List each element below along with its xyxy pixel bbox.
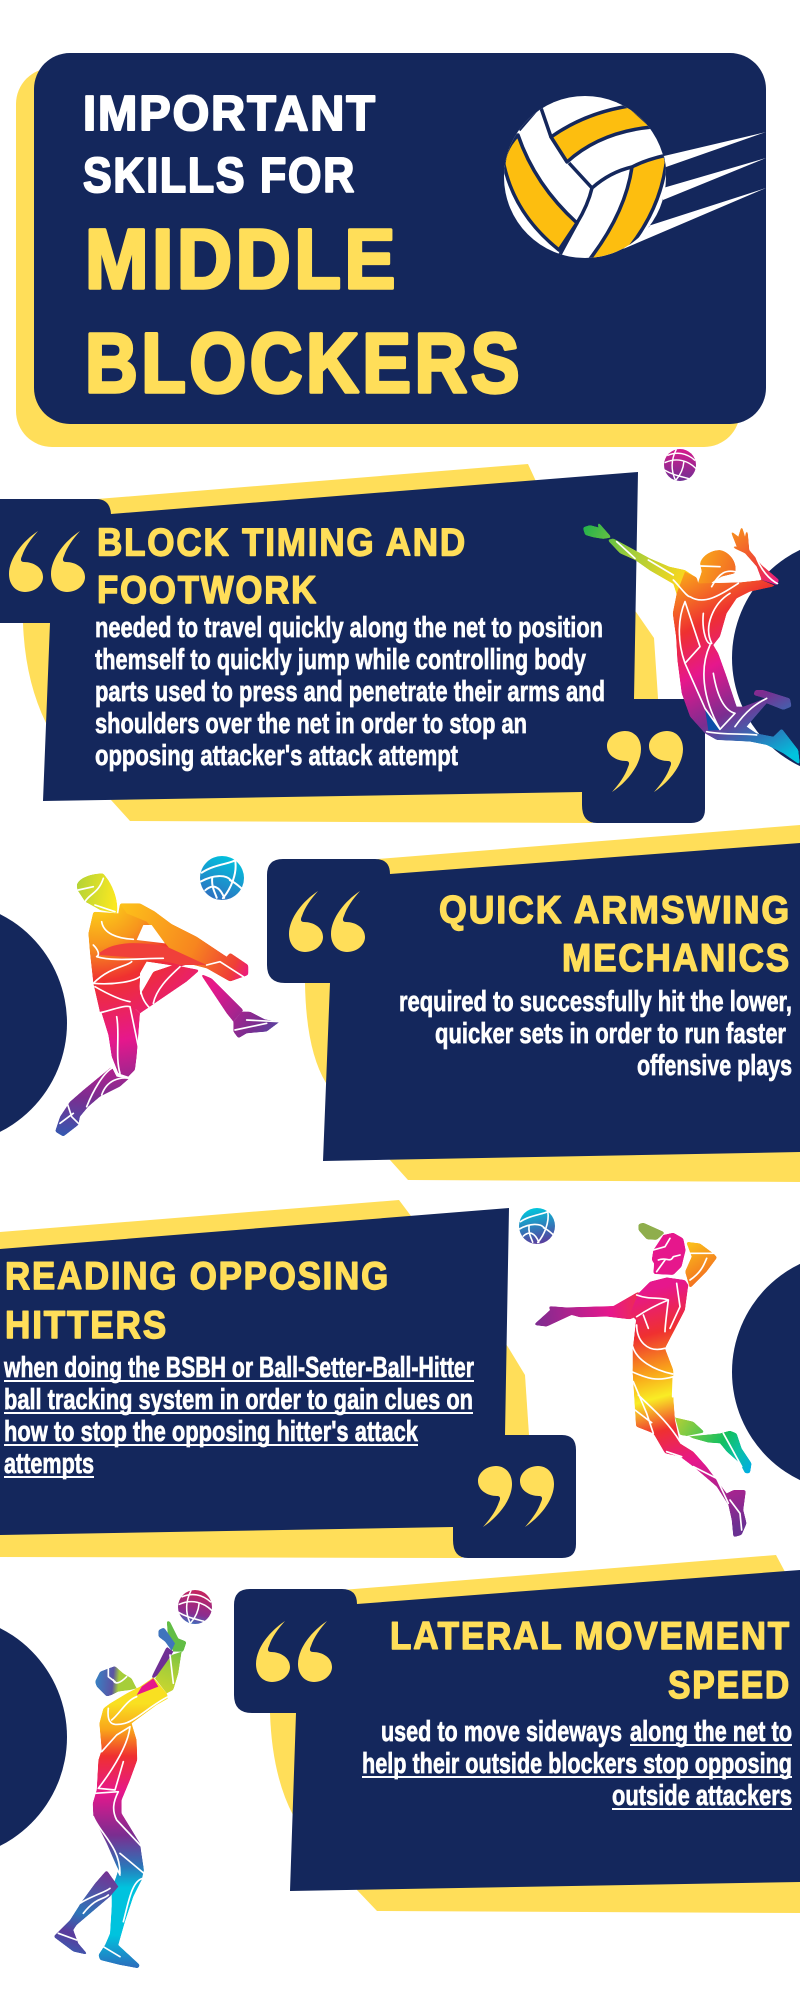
body text xyxy=(399,986,792,1082)
left navy circle xyxy=(0,901,67,1145)
left navy circle xyxy=(0,1615,67,1859)
right navy circle xyxy=(732,1252,800,1492)
panel: reading opposing hitters xyxy=(0,1200,800,1558)
title xyxy=(83,87,523,410)
title: SKILLS FOR xyxy=(83,149,356,203)
icon: volleyball with speed lines xyxy=(504,96,766,264)
panel: lateral movement speed xyxy=(0,1555,800,1968)
heading xyxy=(5,1255,390,1347)
body text xyxy=(95,612,605,772)
yellow backing shape xyxy=(23,464,658,823)
navy quote card xyxy=(0,472,705,823)
illustration: setting player xyxy=(53,1620,187,1968)
navy quote card xyxy=(267,843,800,1161)
body text: needed to travel quickly along the net to position xyxy=(95,612,603,644)
navy quote card xyxy=(0,1208,576,1558)
icon: magenta ball xyxy=(664,449,696,481)
body text: themself to quickly jump while controlling body xyxy=(95,644,586,676)
title: MIDDLE xyxy=(85,212,399,306)
body text: opposing attacker's attack attempt xyxy=(95,740,458,772)
body text underlined xyxy=(3,1352,474,1480)
body text: shoulders over the net in order to stop an xyxy=(95,708,527,740)
body text: parts used to press and penetrate their arms and xyxy=(95,676,605,708)
body text underlined: how to stop the opposing hitter's attack xyxy=(4,1416,419,1448)
body text underlined: ball tracking system in order to gain clues on xyxy=(4,1384,473,1416)
icon: opening quote mark xyxy=(9,531,85,592)
panel: quick armswing mechanics xyxy=(0,825,800,1182)
icon: opening quote mark xyxy=(256,1621,332,1682)
header yellow shadow xyxy=(16,68,740,447)
illustration: jumping player xyxy=(533,1223,752,1537)
title: BLOCKERS xyxy=(85,316,523,410)
icon: opening quote mark xyxy=(289,891,365,952)
icon: blue ball xyxy=(200,856,244,900)
icon: closing quote mark xyxy=(478,1466,554,1527)
header navy card xyxy=(34,53,766,424)
body text partly underlined xyxy=(362,1716,792,1812)
yellow backing shape xyxy=(0,1200,529,1558)
heading: READING OPPOSING xyxy=(5,1255,390,1298)
heading xyxy=(439,889,791,980)
icon: crimson ball xyxy=(178,1590,212,1624)
illustration: passing player xyxy=(55,873,280,1137)
right navy circle xyxy=(732,538,800,778)
heading: BLOCK TIMING AND xyxy=(97,522,467,564)
heading xyxy=(97,522,467,612)
panel: block timing and footwork xyxy=(0,449,800,823)
yellow backing shape xyxy=(270,1555,800,1913)
heading: FOOTWORK xyxy=(97,569,318,612)
icon: closing quote mark xyxy=(607,731,683,792)
heading xyxy=(390,1615,791,1707)
yellow backing shape xyxy=(305,825,800,1182)
icon: teal ball xyxy=(519,1208,555,1244)
body text underlined: when doing the BSBH or Ball-Setter-Ball-Hitter xyxy=(3,1352,474,1384)
title: IMPORTANT xyxy=(83,87,377,141)
body text partly underlined: used to move sideways xyxy=(381,1716,622,1748)
illustration: spiking player xyxy=(583,521,800,765)
panel: header xyxy=(16,53,766,447)
body text underlined: attempts xyxy=(4,1448,94,1480)
navy quote card xyxy=(234,1570,800,1891)
heading: HITTERS xyxy=(5,1304,168,1347)
